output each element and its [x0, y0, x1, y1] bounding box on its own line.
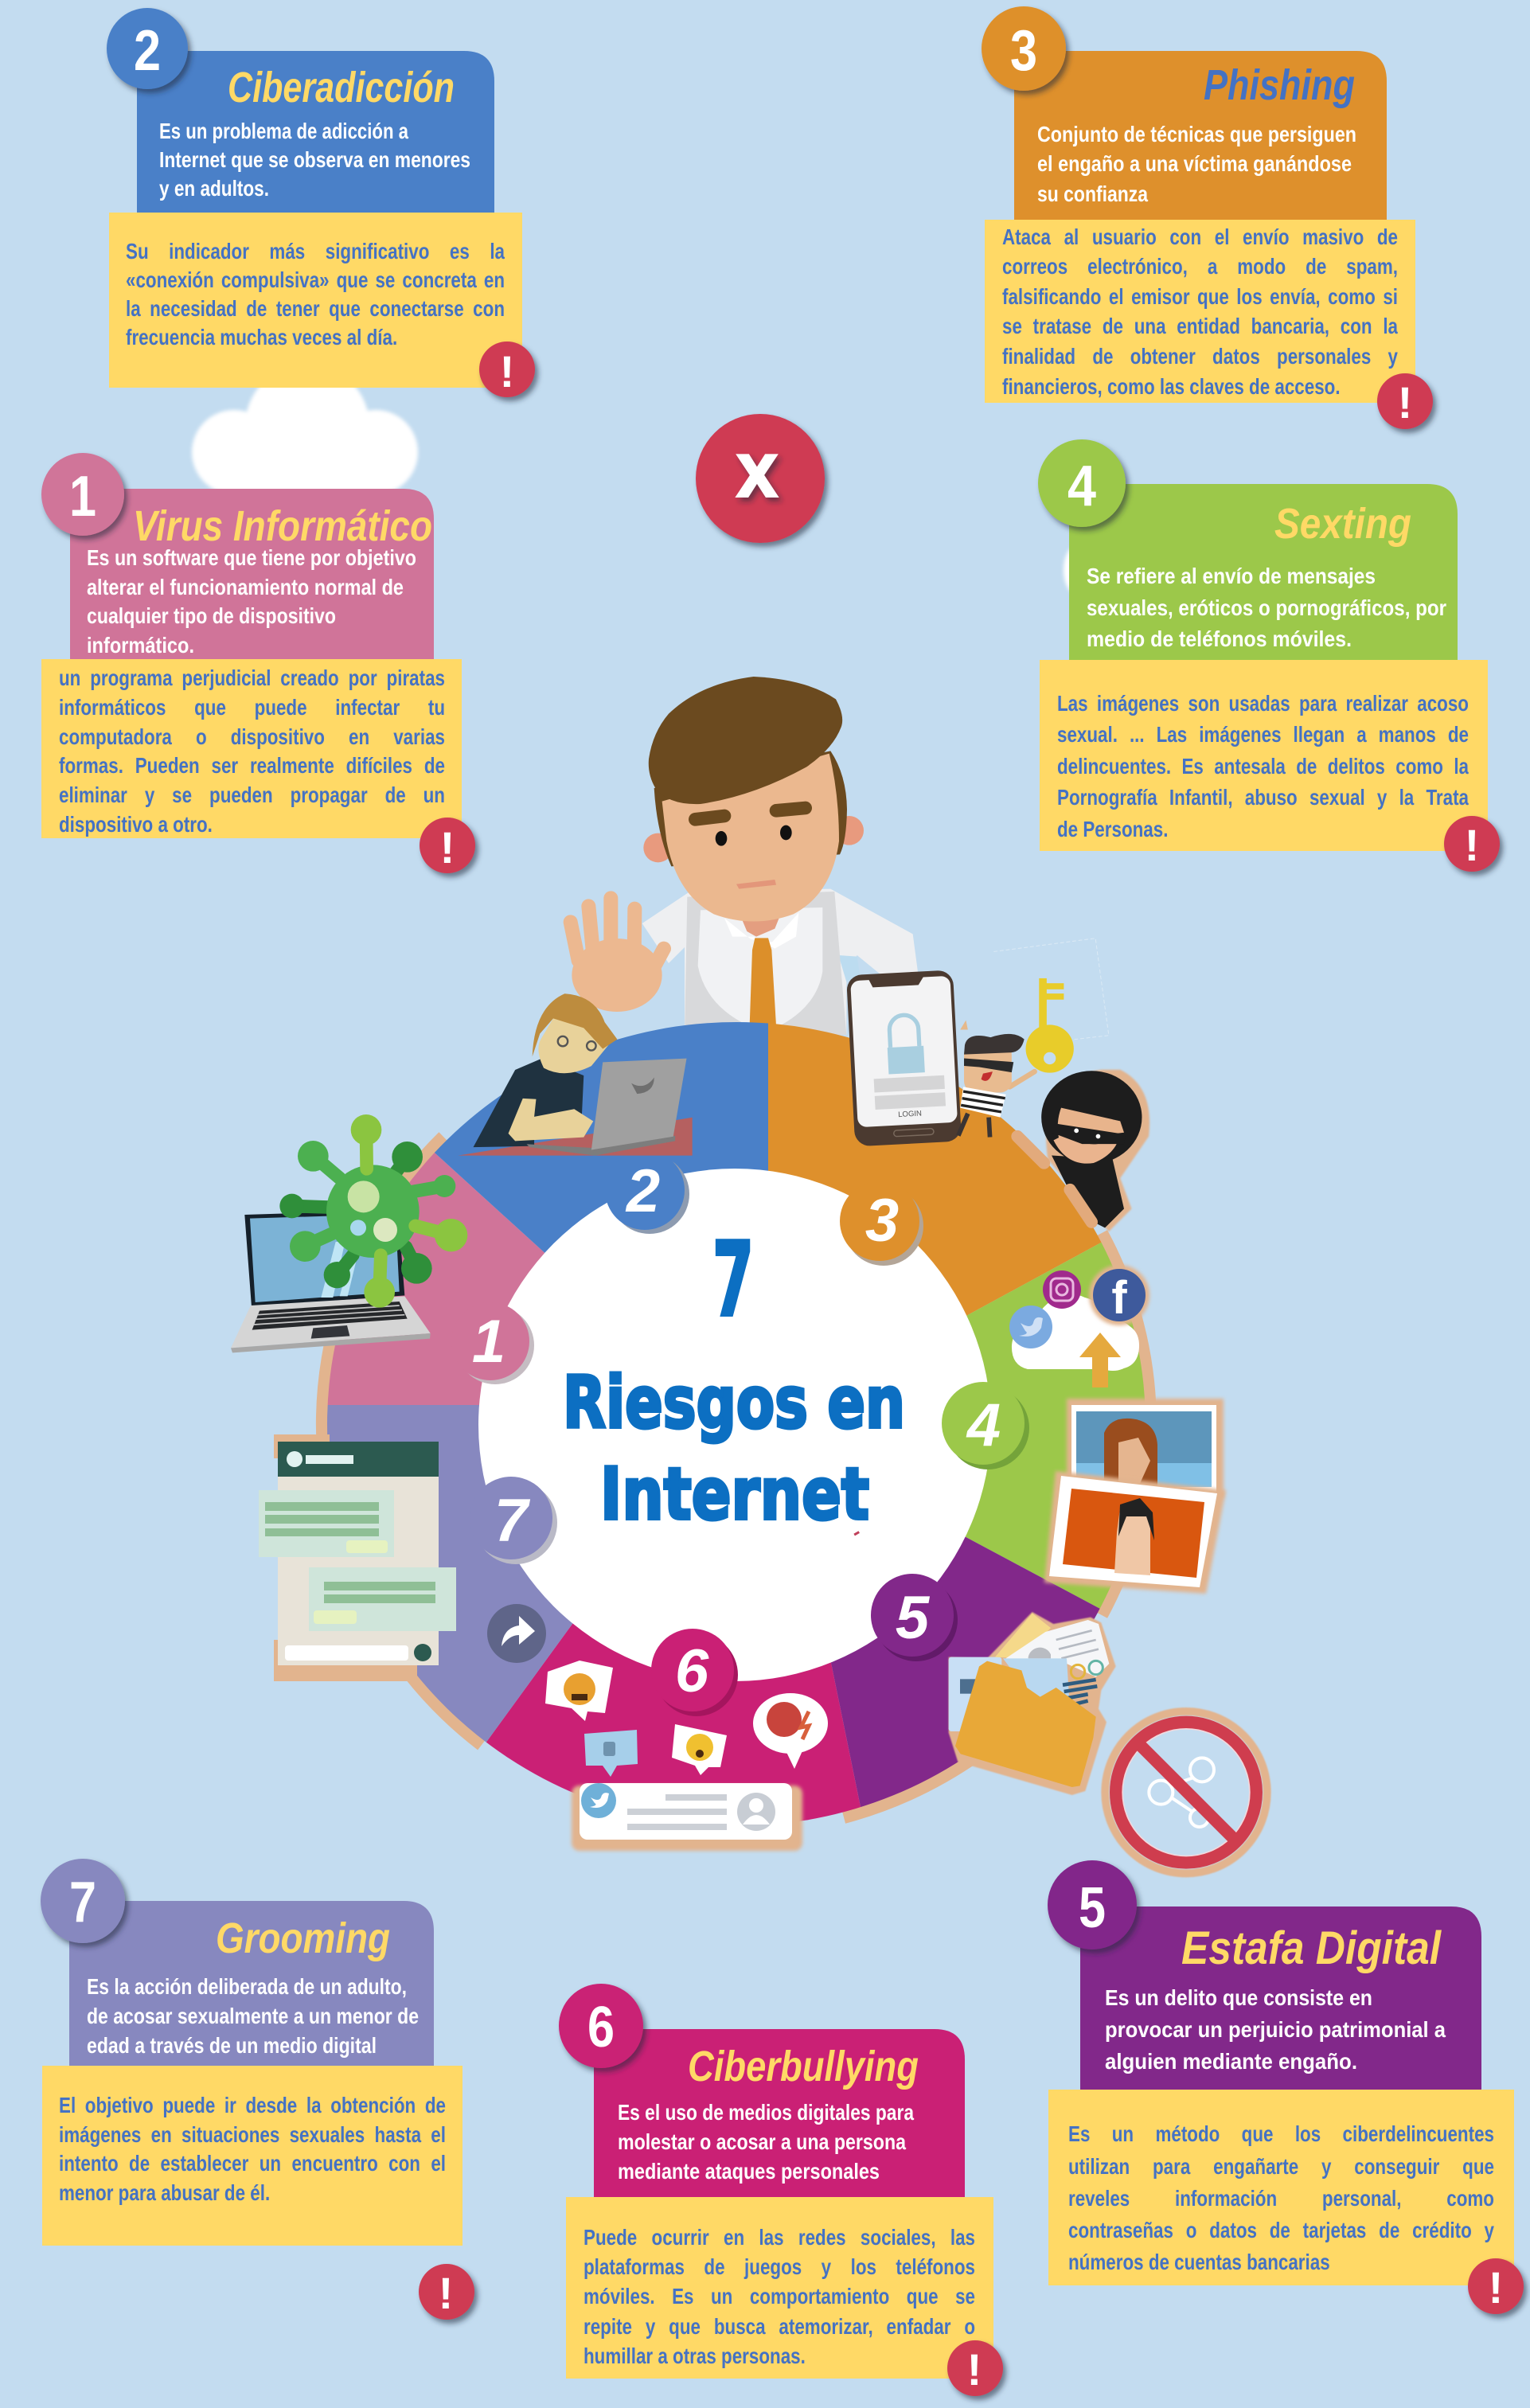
ring segments	[327, 1022, 1145, 1821]
detail text	[1057, 688, 1469, 855]
detail text: móviles. Es un comportamiento que se	[584, 2284, 975, 2308]
detail text: falsificando el emisor que los envía, como si	[1002, 284, 1398, 309]
segment number badges: 7	[494, 1487, 531, 1555]
detail text: finalidad de obtener datos personales y	[1002, 344, 1398, 369]
icon: share button	[487, 1604, 546, 1663]
definition text: edad a través de un medio digital	[87, 2033, 377, 2058]
detail text: Pornografía Infantil, abuso sexual y la Trata	[1057, 785, 1469, 810]
detail text: Ataca al usuario con el envío masivo de	[1002, 224, 1398, 249]
illustration: phone, thieves and key	[846, 939, 1149, 1231]
detail text	[126, 237, 505, 365]
detail text: plataformas de juegos y los teléfonos	[584, 2254, 975, 2279]
illustration: photos	[1044, 1399, 1226, 1594]
number badge 5	[1048, 1860, 1137, 1949]
definition text: Es un software que tiene por objetivo	[87, 545, 416, 570]
panel: Ciberbullying	[559, 1984, 1003, 2396]
number badge 6	[559, 1984, 643, 2068]
number badge 4: 4	[1067, 455, 1096, 518]
definition text: cualquier tipo de dispositivo	[87, 603, 336, 628]
number badge 4	[1038, 439, 1126, 527]
illustration: phone, thieves and key: LOGIN	[898, 1110, 922, 1119]
detail text: delincuentes. Es antesala de delitos como la	[1057, 754, 1469, 779]
icon: alert: !	[1489, 2262, 1503, 2312]
segment number badges: 5	[896, 1584, 931, 1652]
heading: Sexting	[1274, 500, 1411, 548]
detail text: Su indicador más significativo es la	[126, 239, 505, 263]
segment number badges: 3	[865, 1187, 899, 1255]
definition text	[87, 545, 416, 658]
segment number badges: 1	[472, 1308, 505, 1376]
detail text: financieros, como las claves de acceso.	[1002, 374, 1341, 399]
detail text: informáticos que puede infectar tu	[59, 695, 445, 720]
heading: Phishing	[1204, 61, 1355, 109]
illustration: social cloud icons: f	[1111, 1272, 1127, 1324]
detail text: «conexión compulsiva» que se concreta en	[126, 267, 505, 292]
definition text: Conjunto de técnicas que persiguen	[1037, 122, 1356, 146]
number badge 2	[107, 8, 188, 89]
icon: alert	[1444, 816, 1500, 872]
illustration: laptop with virus	[231, 1114, 467, 1352]
definition text: Es el uso de medios digitales para	[618, 2100, 914, 2125]
panel: Estafa Digital	[1048, 1860, 1524, 2314]
definition text: el engaño a una víctima ganándose	[1037, 151, 1352, 176]
detail text: dispositivo a otro.	[59, 812, 213, 837]
illustration: social cloud icons	[1009, 1265, 1149, 1387]
detail text: El objetivo puede ir desde la obtención de	[59, 2093, 446, 2117]
icon: alert	[479, 341, 535, 397]
definition text: alterar el funcionamiento normal de	[87, 575, 404, 599]
icon: alert	[947, 2340, 1003, 2396]
definition text	[618, 2100, 914, 2184]
main title: Riesgos en	[563, 1361, 905, 1445]
detail text: intento de establecer un encuentro con el	[59, 2151, 446, 2176]
detail text: formas. Pueden ser realmente difíciles de	[59, 753, 445, 778]
definition text: mediante ataques personales	[618, 2159, 880, 2184]
definition text: Se refiere al envío de mensajes	[1087, 564, 1376, 588]
detail text: se tratase de una entidad bancaria, con la	[1002, 314, 1398, 338]
definition text: y en adultos.	[159, 176, 269, 201]
main title: Internet	[600, 1453, 869, 1536]
illustration: chat window	[259, 1434, 456, 1681]
detail text: Las imágenes son usadas para realizar acoso	[1057, 691, 1469, 716]
man behind the wheel	[571, 677, 918, 1035]
panel: Phishing	[982, 6, 1433, 429]
illustration: emoji bubbles and tweet	[545, 1661, 828, 1851]
definition text: Internet que se observa en menores	[159, 147, 470, 172]
panel: Virus Informático	[41, 453, 475, 873]
detail text: humillar a otras personas.	[584, 2344, 806, 2368]
decorative cloud sliver	[1064, 546, 1089, 594]
number badge 5: 5	[1079, 1876, 1106, 1940]
definition text: provocar un perjuicio patrimonial a	[1105, 2017, 1446, 2042]
detail text: imágenes en situaciones sexuales hasta el	[59, 2122, 446, 2147]
heading: Grooming	[216, 1914, 390, 1962]
detail text: computadora o dispositivo en varias	[59, 724, 445, 749]
definition text: de acosar sexualmente a un menor de	[87, 2004, 419, 2028]
detail text: Puede ocurrir en las redes sociales, las	[584, 2225, 975, 2250]
detail text: correos electrónico, a modo de spam,	[1002, 254, 1398, 279]
icon: alert: !	[439, 2268, 453, 2318]
detail text: utilizan para engañarte y conseguir que	[1068, 2154, 1494, 2178]
illustration: folder with cards	[949, 1612, 1116, 1795]
detail text: frecuencia muchas veces al día.	[126, 325, 397, 349]
heading: Ciberadicción	[228, 64, 455, 111]
heading: Estafa Digital	[1181, 1922, 1442, 1974]
number badge 2: 2	[134, 19, 161, 83]
icon: alert: !	[1465, 820, 1479, 870]
definition text: su confianza	[1037, 181, 1148, 206]
icon: alert: !	[440, 822, 455, 872]
definition text: sexuales, eróticos o pornográficos, por	[1087, 595, 1446, 620]
number badge 1: 1	[69, 465, 96, 529]
definition text	[1105, 1985, 1446, 2074]
definition text	[87, 1974, 419, 2058]
detail text	[1068, 2118, 1494, 2289]
detail text	[59, 664, 445, 855]
icon: alert	[1377, 373, 1433, 429]
icon: prohibited share sign	[1105, 1711, 1267, 1873]
number badge 3: 3	[1010, 19, 1037, 83]
panel: Sexting	[1038, 439, 1500, 872]
segment number badges	[451, 1150, 1029, 1716]
icon: red x badge: x	[734, 423, 780, 517]
detail text: sexual. ... Las imágenes llegan a manos de	[1057, 722, 1469, 747]
detail text: reveles información personal, como	[1068, 2186, 1494, 2211]
detail text	[1002, 222, 1398, 413]
detail text: un programa perjudicial creado por piratas	[59, 665, 445, 690]
detail text: números de cuentas bancarias	[1068, 2250, 1330, 2274]
definition text	[159, 119, 470, 201]
segment number badges: 6	[675, 1637, 709, 1705]
detail text: eliminar y se pueden propagar de un	[59, 783, 445, 807]
icon: alert	[1468, 2258, 1524, 2314]
number badge 7: 7	[69, 1871, 96, 1934]
illustration: boy on laptop	[458, 993, 693, 1156]
panel: Grooming	[41, 1859, 474, 2320]
icon: alert	[420, 818, 475, 873]
detail text: de Personas.	[1057, 817, 1168, 841]
icon: white cloud	[192, 364, 418, 494]
detail text: Es un método que los ciberdelincuentes	[1068, 2121, 1494, 2146]
number badge 1	[41, 453, 124, 536]
segment number badges: 4	[966, 1391, 1001, 1459]
definition text: medio de teléfonos móviles.	[1087, 626, 1352, 651]
segment number badges: 2	[625, 1157, 660, 1225]
icon: alert: !	[1398, 377, 1412, 427]
number badge 3	[982, 6, 1066, 91]
number badge 7	[41, 1859, 125, 1943]
definition text: molestar o acosar a una persona	[618, 2129, 906, 2154]
panel: Ciberadicción	[107, 8, 535, 397]
icon: alert	[419, 2264, 474, 2320]
number badge 6: 6	[587, 1996, 615, 2059]
definition text: Es un delito que consiste en	[1105, 1985, 1372, 2010]
definition text: Es la acción deliberada de un adulto,	[87, 1974, 407, 1999]
icon: red x badge	[696, 414, 825, 543]
definition text	[1087, 564, 1446, 651]
icon: alert: !	[967, 2344, 982, 2394]
detail text: la necesidad de tener que conectarse con	[126, 296, 505, 321]
definition text: alguien mediante engaño.	[1105, 2049, 1357, 2074]
heading: Virus Informático	[133, 502, 432, 550]
detail text: menor para abusar de él.	[59, 2180, 270, 2205]
detail text: repite y que busca atemorizar, enfadar o	[584, 2313, 975, 2339]
definition text: Es un problema de adicción a	[159, 119, 408, 143]
detail text: contraseñas o datos de tarjetas de crédito y	[1068, 2218, 1494, 2242]
panel: wheel illustration	[231, 677, 1353, 1990]
icon: alert: !	[500, 346, 514, 396]
main title	[563, 1221, 905, 1536]
centre white circle	[478, 1169, 991, 1681]
detail text	[59, 2091, 446, 2219]
definition text	[1037, 122, 1356, 206]
tan outline arcs	[322, 1137, 1150, 1817]
definition text: informático.	[87, 633, 194, 658]
detail text	[584, 2223, 975, 2382]
main title: 7	[712, 1221, 754, 1340]
heading: Ciberbullying	[688, 2043, 919, 2090]
